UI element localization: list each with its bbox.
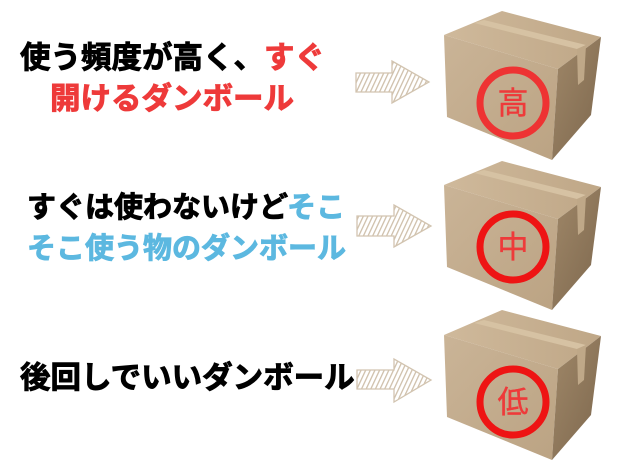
heading: high frequency: 開けるダンボール [50,82,294,116]
arrow 3 [357,359,431,402]
arrow 1 [356,61,429,103]
arrow 2 [357,205,431,247]
heading: low frequency: 後回しでいいダンボール [20,361,355,395]
box 2 [444,161,601,310]
heading: high frequency: 使う頻度が高く、すぐ [20,41,325,75]
stamp 高: 高 [498,86,528,121]
stamp 中 [480,214,546,280]
heading: high frequency [20,40,325,116]
box 1 [444,11,601,160]
stamp 低: 低 [498,385,528,420]
heading: medium frequency: すぐは使わないけどそこ [27,192,345,224]
stamp 低 [480,369,546,435]
stamp 高 [480,70,546,136]
heading: medium frequency: そこ使う物のダンボール [27,233,346,265]
stamp 中: 中 [498,230,528,265]
box 3 [444,310,601,460]
heading: medium frequency [27,192,346,265]
